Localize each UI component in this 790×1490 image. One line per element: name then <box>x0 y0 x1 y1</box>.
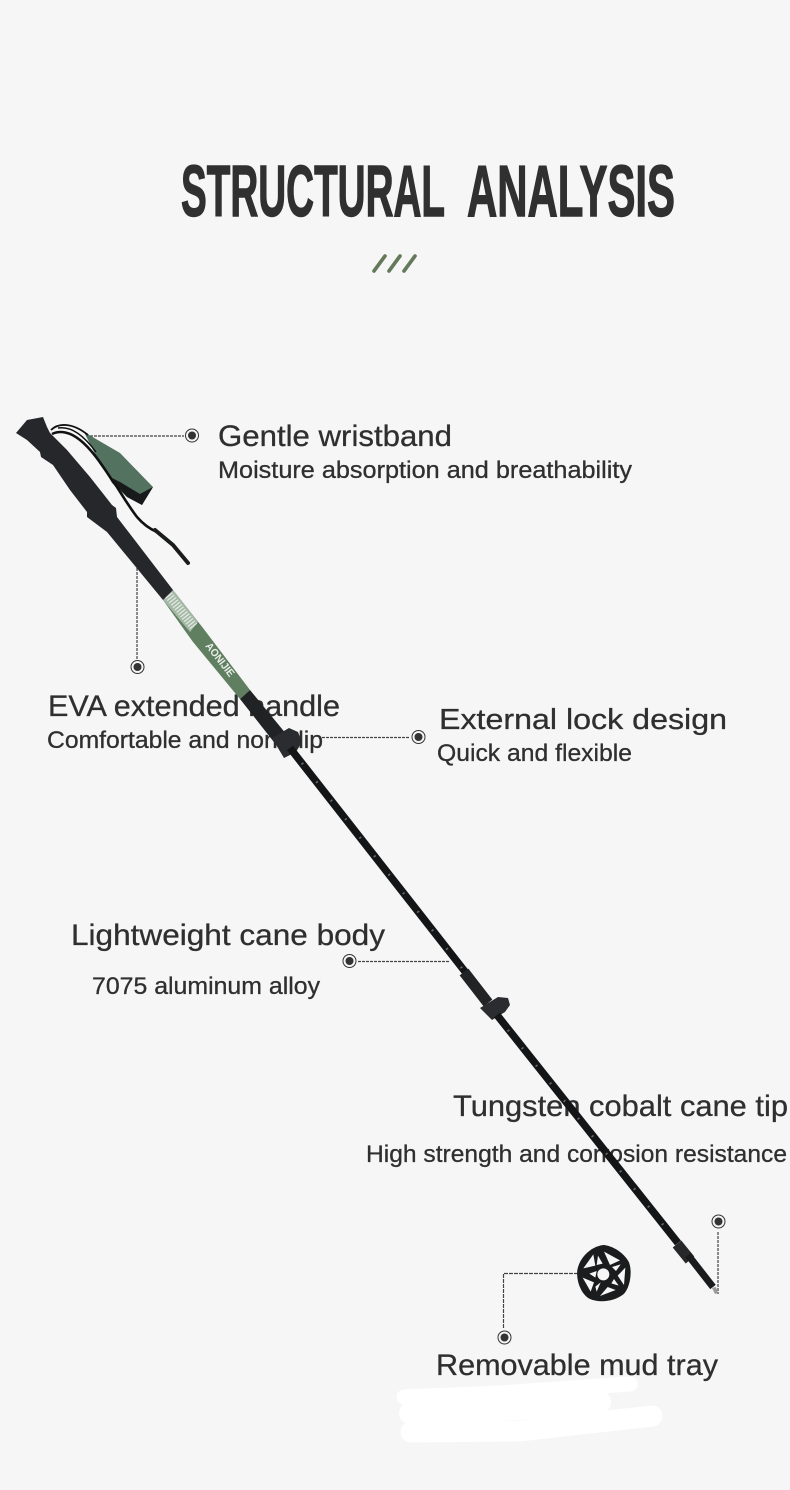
callout: gentle wristband: Gentle wristband <box>218 420 452 453</box>
white brushed-out patch <box>404 1384 652 1432</box>
icon: three green slashes <box>374 256 415 271</box>
title: STRUCTURAL <box>181 152 445 232</box>
trekking pole <box>16 417 718 1294</box>
callout: tungsten cobalt cane tip: Tungsten cobalt cane tip <box>453 1090 788 1123</box>
callout: tungsten cobalt cane tip: High strength and corrosion resistance <box>366 1141 787 1168</box>
callout: tungsten cobalt cane tip <box>366 1090 788 1294</box>
callout: EVA extended handle: Comfortable and non-slip <box>47 727 323 754</box>
EVA handle <box>16 417 173 600</box>
upper black section and lock <box>240 690 470 978</box>
callout: lightweight cane body: Lightweight cane body <box>71 919 385 952</box>
wrist strap <box>51 425 188 563</box>
callout: external lock design: Quick and flexible <box>437 740 632 767</box>
icon: mud tray basket <box>577 1245 631 1301</box>
callout: EVA extended handle: EVA extended handle <box>48 690 340 723</box>
lower section and tip <box>497 1015 718 1294</box>
callout: EVA extended handle <box>47 568 340 754</box>
callout: lightweight cane body <box>71 919 450 1000</box>
callout: gentle wristband <box>86 420 633 484</box>
callout: removable mud tray <box>436 1274 718 1382</box>
callout: external lock design: External lock design <box>439 704 727 736</box>
green shaft <box>163 590 250 699</box>
callout: gentle wristband: Moisture absorption and breathability <box>218 457 633 484</box>
green shaft: AONIJIE <box>203 640 237 679</box>
callout: removable mud tray: Removable mud tray <box>436 1349 718 1382</box>
callout: external lock design <box>322 704 727 767</box>
callout: lightweight cane body: 7075 aluminum alloy <box>92 973 321 1000</box>
lower lock <box>464 972 510 1020</box>
